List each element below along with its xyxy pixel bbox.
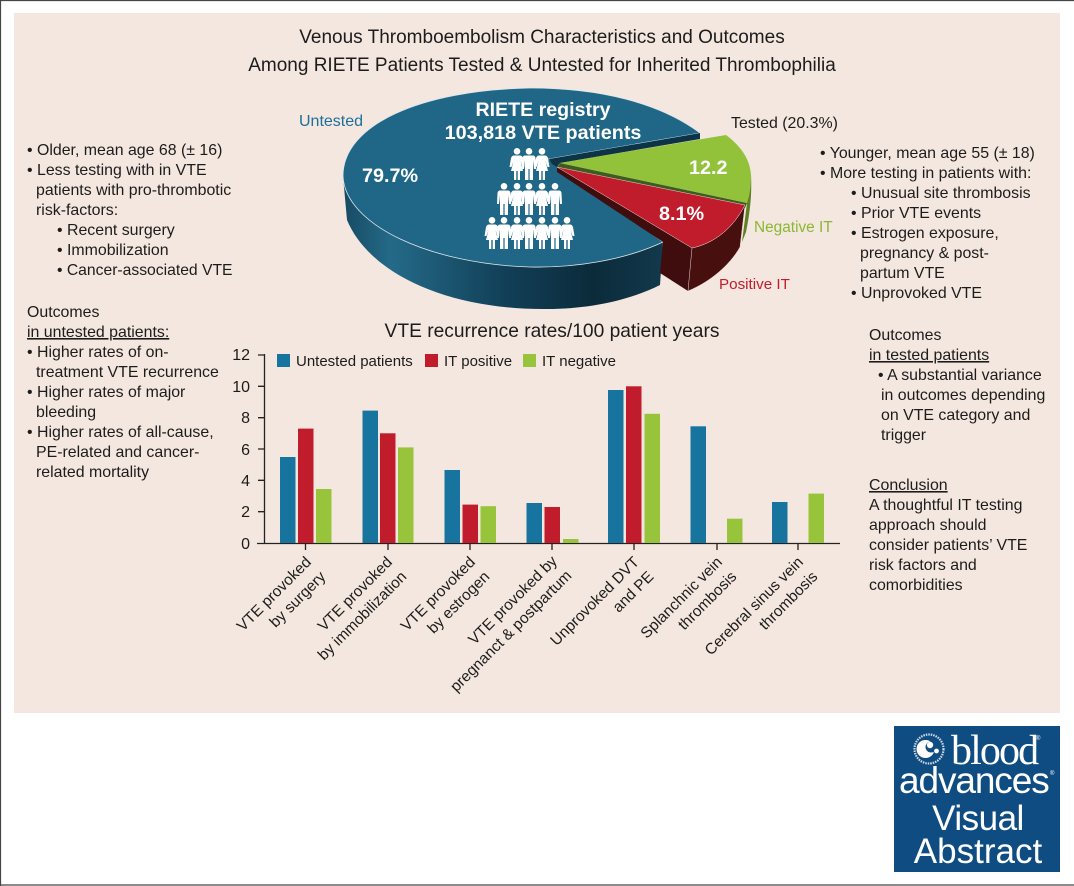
right text: tested characteristics: pregnancy & post- <box>860 245 989 262</box>
y axis labels: 10 <box>232 379 250 396</box>
left text: untested characteristics: • Cancer-associated VTE <box>57 262 233 279</box>
bars: IT negative <box>316 414 824 543</box>
left text: outcomes in untested patients: Outcomes <box>27 304 99 321</box>
background panel <box>14 13 1060 713</box>
value labels <box>362 157 728 225</box>
category labels: Positive IT <box>719 276 790 293</box>
logo: blood advances Visual Abstract: ® <box>1050 770 1055 777</box>
icon: group of people <box>484 148 574 249</box>
left text: untested characteristics: • Older, mean age 68 (± 16) <box>27 142 222 159</box>
right text: tested characteristics: • More testing in patients with: <box>820 165 1031 182</box>
title: Among RIETE Patients Tested & Untested for Inherited Thrombophilia <box>248 55 836 76</box>
y axis labels: 8 <box>241 410 250 427</box>
right text: tested characteristics: • Unprovoked VTE <box>851 285 982 302</box>
category labels: Untested <box>299 113 363 130</box>
pie heading <box>445 99 641 144</box>
bars: IT positive <box>298 386 642 543</box>
x axis labels: thrombosis <box>675 568 741 634</box>
legend: IT negative <box>542 353 616 370</box>
left text: outcomes in untested patients: • Higher rates of all-cause, <box>27 424 214 441</box>
left text: outcomes in untested patients <box>27 304 219 481</box>
right text: outcomes in tested patients: on VTE category and <box>881 407 1030 424</box>
x axis labels: pregnanct & postpartum <box>447 567 575 695</box>
right text: conclusion: risk factors and <box>869 557 977 574</box>
title <box>248 27 836 76</box>
right text: tested characteristics <box>820 145 1035 302</box>
logo: blood advances Visual Abstract: Abstract <box>914 832 1042 871</box>
left text: outcomes in untested patients: • Higher rates of on- <box>27 344 169 361</box>
chart title: VTE recurrence rates/100 patient years <box>385 321 719 342</box>
right text: conclusion: Conclusion <box>869 477 948 494</box>
logo: blood advances Visual Abstract: Visual <box>932 799 1024 838</box>
right text: tested characteristics: • Prior VTE events <box>851 205 981 222</box>
x axis labels: VTE provoked by <box>465 553 561 648</box>
right text: conclusion: comorbidities <box>869 577 963 594</box>
y axis labels: 4 <box>241 473 250 490</box>
x axis labels: by surgery <box>266 568 330 631</box>
right text: tested characteristics: partum VTE <box>860 265 945 282</box>
y axis labels: 12 <box>232 347 250 364</box>
x axis labels: thrombosis <box>756 568 822 634</box>
y axis labels: 0 <box>241 536 250 553</box>
x axis labels: by estrogen <box>424 568 493 637</box>
pie slice: negative IT wall <box>742 175 751 242</box>
inner wall of wedge gap <box>549 133 700 167</box>
category labels: Negative IT <box>754 219 833 236</box>
icon: society seal <box>914 734 944 764</box>
left text: untested characteristics: • Immobilization <box>57 242 169 259</box>
x axis labels: and PE <box>610 568 657 616</box>
right text: tested characteristics: • Younger, mean age 55 (± 18) <box>820 145 1035 162</box>
left text: outcomes in untested patients: related mortality <box>36 464 149 481</box>
bar chart: VTE recurrence rates <box>232 321 840 695</box>
left text: untested characteristics: risk-factors: <box>36 202 118 219</box>
x axis labels <box>234 553 822 695</box>
left text: untested characteristics: • Recent surgery <box>57 222 175 239</box>
right text: conclusion: consider patients’ VTE <box>869 537 1027 554</box>
logo: blood advances Visual Abstract <box>894 726 1060 872</box>
pie slice: untested side wall <box>343 176 663 309</box>
right text: conclusion <box>869 477 1027 594</box>
value labels: 12.2 <box>689 157 728 179</box>
logo: blood advances Visual Abstract: ® <box>1036 735 1041 742</box>
legend: Untested patients <box>296 353 413 370</box>
right text: outcomes in tested patients: • A substantial variance <box>878 367 1042 384</box>
title: Venous Thromboembolism Characteristics and Outcomes <box>299 27 785 48</box>
logo: blood advances Visual Abstract: advances <box>899 760 1049 801</box>
pie heading: 103,818 VTE patients <box>445 122 641 144</box>
category labels <box>299 113 838 293</box>
left text: outcomes in untested patients: • Higher rates of major <box>27 384 186 401</box>
value labels: 8.1% <box>659 203 704 225</box>
right text: outcomes in tested patients: in outcomes depending <box>881 387 1045 404</box>
legend: IT positive <box>444 353 512 370</box>
left text: outcomes in untested patients: bleeding <box>36 404 96 421</box>
pie chart: 3D registry breakdown <box>299 88 838 309</box>
y axis labels: 2 <box>241 504 250 521</box>
pie heading: RIETE registry <box>475 99 611 121</box>
x axis labels: VTE provoked <box>315 554 396 635</box>
right text: outcomes in tested patients: trigger <box>881 427 927 444</box>
right text: tested characteristics: • Estrogen exposure, <box>851 225 999 242</box>
bars: untested patients <box>280 390 788 543</box>
left text: untested characteristics <box>27 142 233 279</box>
pie slice: negative IT 12.2 <box>560 135 751 203</box>
right text: conclusion: approach should <box>869 517 987 534</box>
right text: outcomes in tested patients <box>869 327 1045 444</box>
y axis labels: 6 <box>241 442 250 459</box>
x axis labels: Splanchnic vein <box>638 554 726 642</box>
right text: tested characteristics: • Unusual site thrombosis <box>851 185 1031 202</box>
value labels: 79.7% <box>362 165 419 187</box>
x axis labels: VTE provoked <box>234 554 315 635</box>
x axis labels: by immobilization <box>315 568 410 664</box>
pie slice: untested 79.7% <box>343 88 700 267</box>
category labels: Tested (20.3%) <box>731 115 838 132</box>
axes <box>257 354 840 550</box>
left text: outcomes in untested patients: treatment VTE recurrence <box>36 364 219 381</box>
left text: outcomes in untested patients: PE-related and cancer- <box>36 444 199 461</box>
right text: outcomes in tested patients: Outcomes <box>869 327 941 344</box>
legend <box>277 353 616 370</box>
left text: untested characteristics: • Less testing with in VTE <box>27 162 207 179</box>
x axis labels: Cerebral sinus vein <box>702 554 807 659</box>
x axis labels: Unprovoked DVT <box>547 553 643 649</box>
right text: conclusion: A thoughtful IT testing <box>869 497 1022 514</box>
pie slice: positive IT 8.1% <box>557 167 745 248</box>
x axis labels: VTE provoked <box>398 554 479 635</box>
right text: outcomes in tested patients: in tested patients <box>869 347 989 364</box>
left text: outcomes in untested patients: in untested patients: <box>27 324 169 341</box>
logo: blood advances Visual Abstract: blood <box>951 728 1039 774</box>
y axis labels <box>232 347 250 553</box>
pie slice: positive IT wall <box>557 167 692 291</box>
left text: untested characteristics: patients with pro-thrombotic <box>36 182 231 199</box>
